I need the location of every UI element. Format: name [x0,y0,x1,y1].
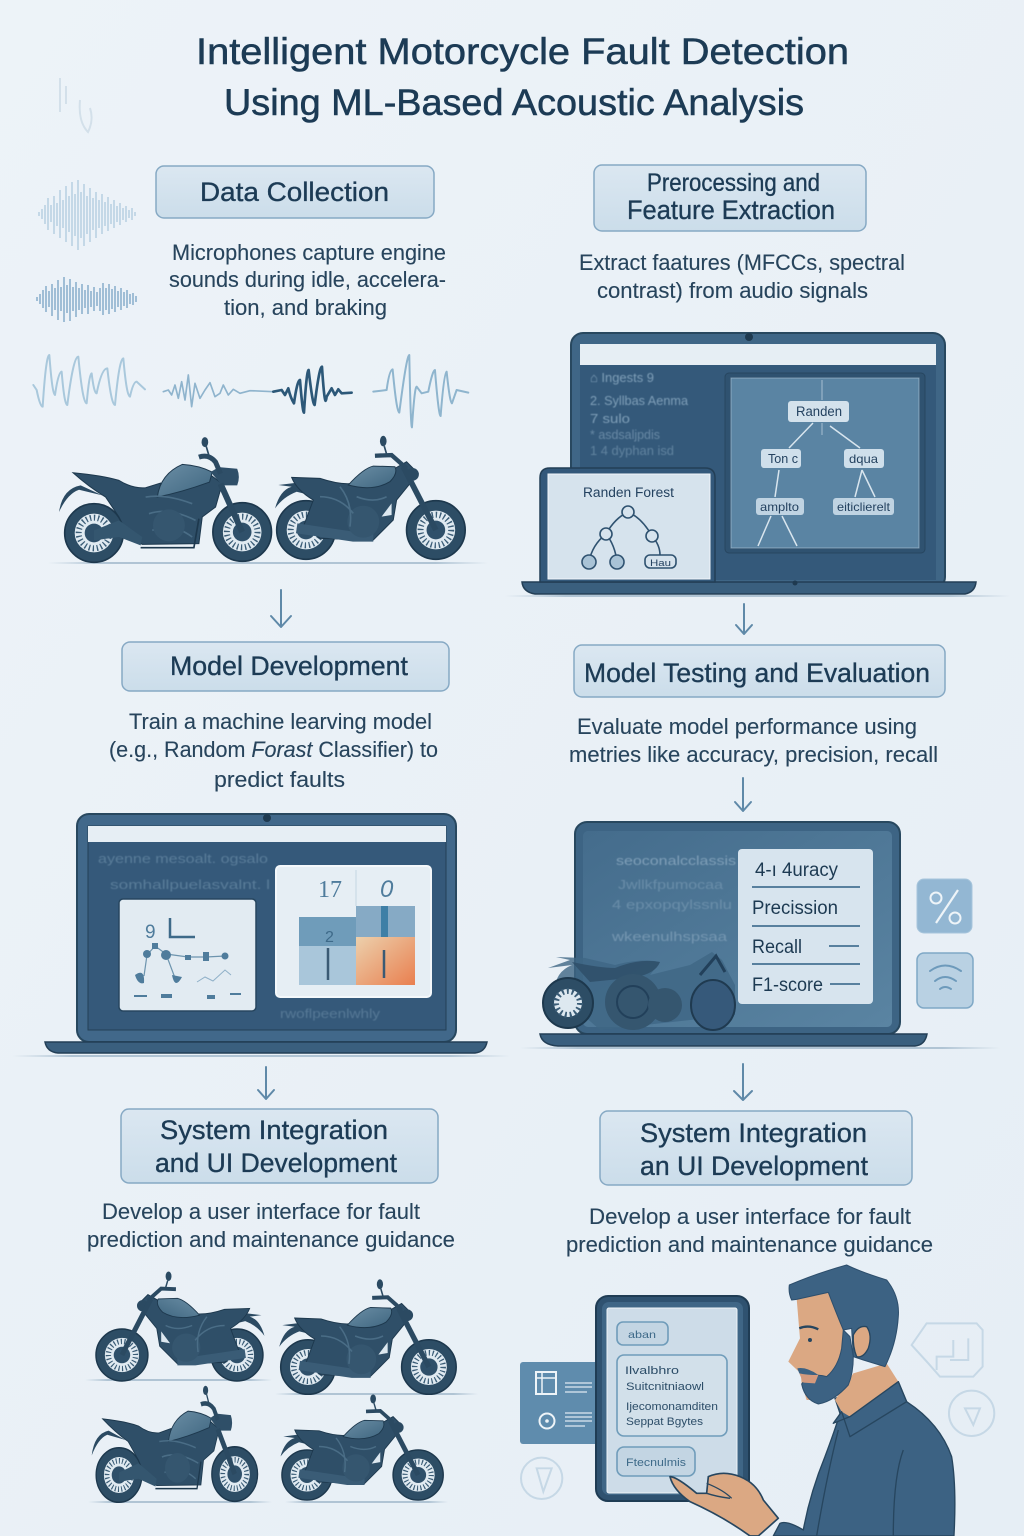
panel: preprocessing and feature extraction [505,165,1010,597]
text: model testing description [569,714,938,767]
text: model development description: (e.g., Random Forast Classifier) to [109,737,438,762]
card: fault prediction text: Seppat Bgytes [626,1416,704,1428]
text: model testing description: metries like accuracy, precision, recall [569,742,938,767]
panel: decision tree screen: dqua [849,452,878,466]
panel: side app card [520,1362,600,1444]
heading: preprocessing: Prerocessing and [647,169,820,197]
illustration: bearded man holding tablet [670,1265,955,1536]
panel: decision tree screen: Ton c [768,451,798,466]
icon: motorcycle bottom left [92,1386,258,1502]
ground lines [85,1379,478,1503]
heading: model testing [574,645,945,697]
card: metrics list: F1-score [752,975,823,996]
title: Using ML-Based Acoustic Analysis [224,82,804,123]
text: faint code lines: wkeenulhspsaa [611,929,728,944]
icon: motorcycle top left [96,1272,264,1381]
text: model testing description: Evaluate model performance using [577,714,917,739]
panel: decision tree screen: amplto [760,500,799,514]
text: integration description left [87,1199,455,1252]
icon: faint background symbols [521,1323,994,1499]
panel: decision tree screen [725,373,925,553]
illustration: laptop with metrics [520,822,1000,1049]
icon: percent tile [917,879,972,933]
text: model development description: predict faults [214,767,345,792]
text: data collection description [169,240,446,320]
button: alert: aban [628,1329,656,1341]
card: fault prediction text: Ijecomonamditen [626,1401,718,1413]
text: data collection description: Microphones capture engine [172,240,446,265]
icon: wifi tile [917,953,973,1008]
text: faint code lines: 7 sulo [590,411,630,426]
text: faint code lines: seoconalcclassis [616,853,737,868]
heading: system integration right: System Integration [640,1118,867,1148]
text: model development description [109,709,438,792]
text: faint code lines: 4 epxopqylssnlu [612,897,732,912]
text: faint code lines: ayenne mesoalt. ogsalo [98,851,268,866]
card: fault prediction text [617,1355,727,1436]
base of laptop [45,1042,487,1053]
card: confusion matrix: 17 [318,877,342,903]
face [788,1292,853,1400]
panel: decision tree screen: Randen [796,404,842,419]
heading: system integration left [121,1109,438,1183]
text: preprocessing description [579,250,905,303]
card: metrics list: Precission [752,898,838,919]
heading: model testing: Model Testing and Evaluation [584,658,930,688]
text: faint code lines: Jwllkfpumocaa [618,877,724,892]
card: confusion matrix: 0 [380,876,394,903]
illustration: laptop with model charts [12,814,510,1057]
shirt seams [817,1430,903,1536]
mouth [799,1373,818,1383]
neck [835,1363,898,1417]
text: integration description right: prediction and maintenance guidance [566,1232,933,1257]
text: integration description right [566,1204,933,1257]
title [196,31,849,123]
heading: system integration left: System Integration [160,1115,388,1145]
text: faint code lines: 2. Syllbas Aenma [590,393,689,408]
hair [789,1265,898,1367]
card: scatter graph [119,899,256,1011]
card: metrics list [738,849,873,1004]
card: confusion matrix [276,866,431,997]
icon: upper sound waveform [39,180,135,250]
ground line [48,562,488,564]
heading: system integration right [600,1111,912,1185]
panel: data collection [33,166,488,564]
heading: model development: Model Development [170,651,408,681]
hand [670,1473,778,1536]
button: alert [617,1322,668,1345]
text: faint code lines: ⌂ Ingests 9 [590,370,654,385]
button: recommendation [617,1447,695,1476]
heading: system integration left: and UI Development [155,1148,397,1178]
text: integration description right: Develop a user interface for fault [589,1204,911,1229]
icon: motorcycle top right [279,1279,456,1394]
icon: blended motorcycle [543,952,735,1030]
text: integration description left: Develop a user interface for fault [102,1199,420,1224]
panel: model development [12,642,510,1057]
text: faint code lines [98,851,381,1021]
beard [802,1330,853,1404]
card: confusion matrix: 2 [325,929,334,946]
heading: model development [122,642,449,691]
card: scatter graph: 9 [145,922,156,943]
text: faint code lines: somhallpuelasvalnt. l [110,877,270,892]
text: integration description left: prediction and maintenance guidance [87,1227,455,1252]
icon: motorcycle right [275,436,465,559]
illustration: laptop with decision tree [505,333,1010,597]
card: fault prediction text: Suitcnitniaowl [626,1381,704,1393]
icon: motorcycle bottom right [280,1394,443,1500]
text: data collection description: sounds during idle, accelera- [169,267,446,292]
icon: motorcycle left [59,437,271,562]
text: faint code lines [611,853,737,944]
collar [833,1382,907,1437]
text: model development description: Train a machine learving model [129,709,432,734]
panel: model testing and evaluation [520,645,1000,1049]
text: preprocessing description: contrast) from audio signals [597,278,868,303]
panel: decision tree screen: eiticlierelt [837,500,891,514]
card: metrics list: 4-ı 4uracy [755,860,838,881]
chart: four acoustic waveforms [33,355,468,427]
card: fault prediction text: Ilvalbhro [625,1365,679,1377]
text: faint code lines: rwoflpeenlwhly [280,1006,381,1021]
panel: system integration left [85,1109,478,1503]
icon: middle sound waveform [37,277,136,322]
base of laptop [522,582,976,594]
text: data collection description: tion, and braking [224,295,387,320]
heading: data collection [156,166,434,218]
base of laptop [540,1034,927,1046]
heading: preprocessing: Feature Extraction [627,195,835,225]
panel: system integration right [520,1111,994,1536]
text: faint code lines [590,370,689,458]
text: preprocessing description: Extract faatures (MFCCs, spectral [579,250,905,275]
text: faint code lines: 1 4 dyphan isd [590,443,674,458]
heading: system integration right: an UI Development [640,1151,868,1181]
small laptop: random forest [540,468,715,582]
shirt [773,1382,955,1536]
text: faint code lines: * asdsaljpdis [590,427,660,442]
heading: preprocessing [594,165,866,231]
arrow: right laptop to integration [734,1064,752,1100]
illustration: tablet [596,1296,749,1501]
heading: data collection: Data Collection [200,177,389,207]
button: recommendation: Ftecnulmis [626,1457,687,1469]
small laptop: random forest: Hau [650,558,671,568]
small laptop: random forest: Randen Forest [583,485,674,500]
arrow: collection to model development [271,590,291,627]
icon: faint top-left sketch [60,78,92,132]
eye and brow [799,1327,818,1329]
arrow: left laptop to integration [258,1067,274,1099]
title: Intelligent Motorcycle Fault Detection [196,31,849,72]
ear [853,1326,870,1357]
arrow: description to laptop [735,778,751,811]
card: metrics list: Recall [752,937,802,958]
arrow: preprocessing to testing [736,604,752,634]
